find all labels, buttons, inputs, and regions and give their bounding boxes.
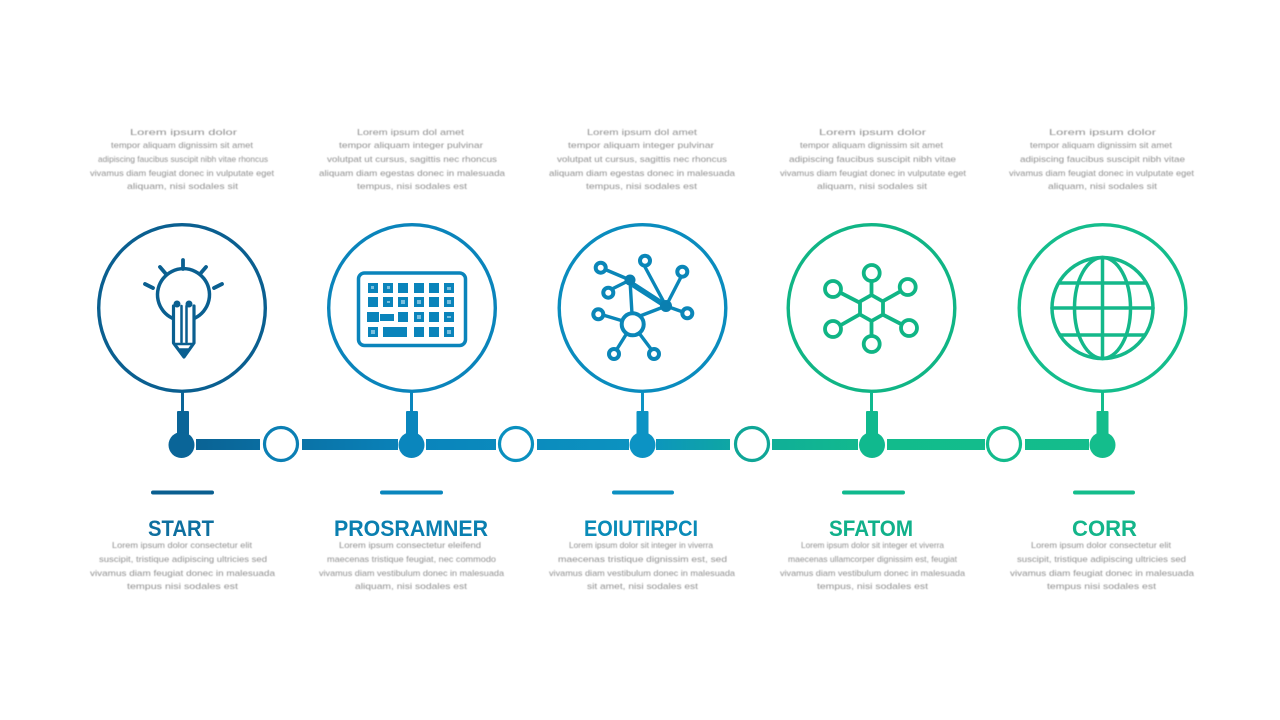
step 1 text: Lorem ipsum dolor consectetur elit: [112, 540, 253, 550]
step 1 description: Lorem ipsum dolor: [130, 127, 237, 137]
step 5 description: Lorem ipsum dolor: [1049, 127, 1156, 137]
step 5 rule: [1073, 490, 1135, 494]
step 2 description: aliquam diam egestas donec in malesuada: [319, 168, 505, 178]
step 2: programmer: [319, 127, 505, 591]
icon: light bulb with pencil: [145, 260, 222, 357]
step 4 description: aliquam, nisi sodales sit: [817, 181, 928, 191]
step 4 description: adipiscing faucibus suscipit nibh vitae: [789, 154, 956, 164]
step 1 description: adipiscing faucibus suscipit nibh vitae rhoncus: [98, 154, 268, 164]
step 1 stem: [168, 392, 194, 458]
step 1 text: vivamus diam feugiat donec in malesuada: [90, 568, 275, 578]
step 4 text: maecenas ullamcorper dignissim est, feugiat: [788, 554, 958, 564]
step 2 description: volutpat ut cursus, sagittis nec rhoncus: [327, 154, 497, 164]
step 1 description: aliquam, nisi sodales sit: [127, 181, 239, 191]
step 3 text: Lorem ipsum dolor sit integer in viverra: [569, 540, 713, 550]
step 5 text: Lorem ipsum dolor consectetur elit: [1031, 540, 1172, 550]
step 4 stem: [859, 392, 885, 458]
icon: branching network: [593, 256, 692, 359]
step 4 description: Lorem ipsum dolor: [819, 127, 926, 137]
step 3 description: aliquam diam egestas donec in malesuada: [549, 168, 735, 178]
step 4 text: Lorem ipsum dolor sit integer et viverra: [801, 540, 944, 550]
step 2 stem: [398, 392, 424, 458]
step 1 title: START: [148, 516, 215, 541]
icon: hub network: [825, 265, 917, 352]
step 1: start: [90, 127, 275, 591]
step 2 text: Lorem ipsum consectetur eleifend: [339, 540, 481, 550]
step 3 circle: [559, 225, 726, 391]
step 3 text: maecenas tristique dignissim est, sed: [558, 554, 727, 564]
step 4 circle: [788, 225, 955, 391]
step 2 text: aliquam, nisi sodales est: [355, 581, 468, 591]
step 4: system: [780, 127, 967, 591]
step 1 text: [90, 540, 275, 591]
step 1 description: vivamus diam feugiat donec in vulputate eget: [90, 168, 275, 178]
step 2 description: Lorem ipsum dol amet: [357, 127, 465, 137]
step 1 rule: [151, 490, 214, 494]
step 5 description: tempor aliquam dignissim sit amet: [1030, 140, 1173, 150]
step 5 description: aliquam, nisi sodales sit: [1048, 181, 1158, 191]
step 3 description: tempus, nisi sodales est: [586, 181, 698, 191]
step 1 circle: [99, 225, 265, 391]
step 5 description: vivamus diam feugiat donec in vulputate eget: [1009, 168, 1195, 178]
step 2 description: [319, 127, 505, 191]
step 3 text: sit amet, nisi sodales est: [587, 581, 699, 591]
step 5 text: [1010, 540, 1194, 591]
step 2 rule: [380, 490, 443, 494]
step 4 text: tempus, nisi sodales est: [817, 581, 929, 591]
step 3 description: [549, 127, 735, 191]
timeline: [196, 439, 1089, 450]
step 5 title: CORR: [1072, 516, 1137, 541]
step 2 circle: [329, 225, 495, 391]
step 5 description: adipiscing faucibus suscipit nibh vitae: [1020, 154, 1185, 164]
step 5 text: vivamus diam feugiat donec in malesuada: [1010, 568, 1194, 578]
step 5: core: [1009, 127, 1195, 591]
step 5 text: tempus nisi sodales est: [1047, 581, 1157, 591]
step 2 description: tempus, nisi sodales est: [357, 181, 468, 191]
step 1 text: tempus nisi sodales est: [127, 581, 239, 591]
step 5 description: [1009, 127, 1195, 191]
step 4 description: vivamus diam feugiat donec in vulputate eget: [780, 168, 967, 178]
step 5 circle: [1019, 225, 1186, 391]
icon: keyboard: [358, 273, 466, 346]
step 3: evolution: [549, 127, 735, 591]
step 5 stem: [1090, 392, 1116, 458]
step 3 text: vivamus diam vestibulum donec in malesuada: [549, 568, 735, 578]
step 1 description: tempor aliquam dignissim sit amet: [111, 140, 254, 150]
step 5 text: suscipit, tristique adipiscing ultricies sed: [1017, 554, 1186, 564]
step 2 title: PROSRAMNER: [334, 516, 488, 541]
step 1 description: [90, 127, 275, 191]
step 3 stem: [630, 392, 656, 458]
step 4 rule: [842, 490, 905, 494]
step 3 title: EOIUTIRPCI: [584, 516, 698, 541]
step 4 description: [780, 127, 967, 191]
step 3 text: [549, 540, 735, 591]
step 4 description: tempor aliquam dignissim sit amet: [800, 140, 944, 150]
step 4 text: vivamus diam vestibulum donec in malesuada: [780, 568, 965, 578]
step 1 text: suscipit, tristique adipiscing ultricies sed: [99, 554, 267, 564]
step 2 text: vivamus diam vestibulum donec in malesuada: [319, 568, 504, 578]
step 3 rule: [612, 490, 674, 494]
step 2 text: maecenas tristique feugiat, nec commodo: [327, 554, 496, 564]
step 4 text: [780, 540, 965, 591]
step 3 description: tempor aliquam integer pulvinar: [568, 140, 714, 150]
step 4 title: SFATOM: [829, 516, 913, 541]
step 3 description: volutpat ut cursus, sagittis nec rhoncus: [557, 154, 727, 164]
step 2 text: [319, 540, 504, 591]
icon: globe: [1052, 258, 1153, 358]
timeline connector rings: [264, 428, 1020, 460]
step 3 description: Lorem ipsum dol amet: [587, 127, 698, 137]
step 2 description: tempor aliquam integer pulvinar: [339, 140, 483, 150]
